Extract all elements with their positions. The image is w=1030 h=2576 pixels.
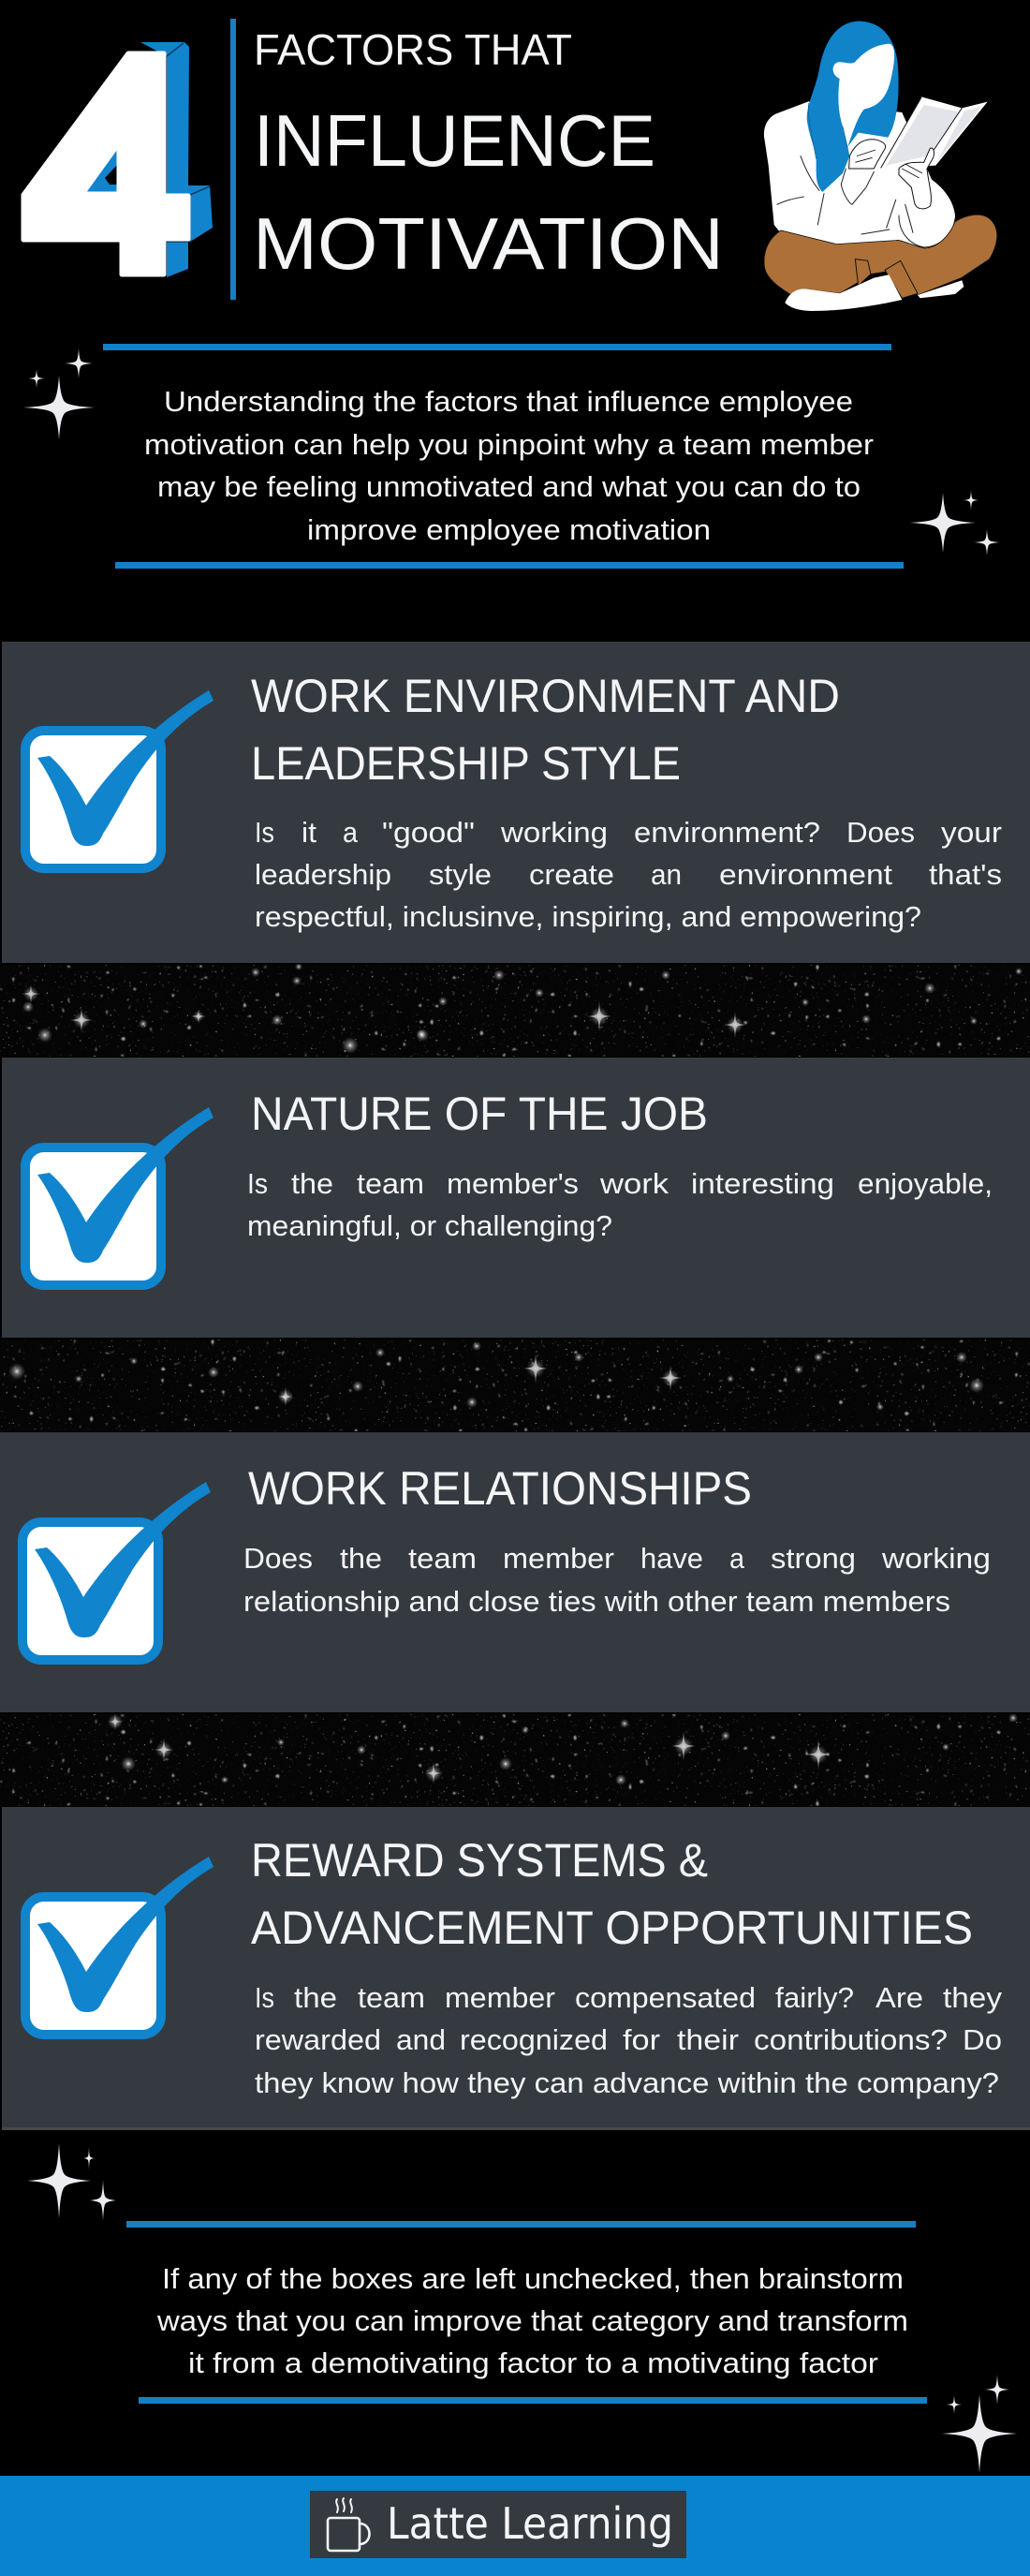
icon: checked box 1: [25, 690, 213, 868]
sparkles: upper left: [23, 348, 95, 439]
closing text: If any of the boxes are left unchecked, then brainstorm: [162, 2262, 904, 2295]
body text: recognized: [460, 2023, 608, 2056]
panel: nature of the job: [2, 1058, 1030, 1338]
heading: [251, 1834, 973, 1954]
body text: leadership: [255, 858, 391, 891]
body text: your: [941, 816, 1002, 849]
footer band: [0, 2476, 1030, 2576]
body text: they know how they can advance within the company?: [255, 2066, 999, 2099]
body text: their: [677, 2023, 739, 2056]
body text: it: [302, 816, 316, 849]
panel: work environment and leadership style: [2, 642, 1030, 963]
body text: Do: [963, 2023, 1002, 2056]
title: INFLUENCE: [254, 99, 655, 182]
body text: work: [599, 1167, 670, 1200]
logo: Latte Learning: [310, 2491, 686, 2558]
closing text: ways that you can improve that category and transform: [156, 2304, 908, 2337]
body text: fairly?: [775, 1981, 854, 2014]
icon: checked box 4: [25, 1857, 213, 2035]
body text: working: [881, 1542, 991, 1575]
title: [253, 25, 724, 285]
body text: environment: [719, 858, 892, 891]
body text: they: [943, 1981, 1003, 2014]
divider: top intro rule: [103, 344, 891, 350]
heading: ADVANCEMENT OPPORTUNITIES: [251, 1902, 973, 1954]
body text: Are: [876, 1981, 923, 2014]
body text: Is: [255, 816, 274, 849]
heading: REWARD SYSTEMS &: [251, 1834, 708, 1887]
body text: style: [429, 858, 492, 891]
intro text: [144, 385, 874, 546]
body text: "good": [382, 816, 475, 849]
sparkles: lower right: [942, 2375, 1017, 2473]
brand name: Latte Learning: [387, 2498, 673, 2549]
body text: member: [445, 1981, 555, 2014]
body text: have: [640, 1542, 703, 1575]
divider: bottom closing rule: [139, 2397, 927, 2404]
panel: work relationships: [0, 1432, 1030, 1712]
body text: that's: [929, 858, 1002, 891]
heading: NATURE OF THE JOB: [251, 1088, 708, 1140]
body text: a: [343, 816, 359, 849]
star band 1: [0, 963, 1030, 1057]
heading: [251, 670, 840, 790]
body text: strong: [771, 1542, 856, 1575]
divider: top closing rule: [126, 2221, 916, 2228]
intro text: improve employee motivation: [307, 513, 711, 546]
body text: interesting: [691, 1167, 834, 1200]
title: MOTIVATION: [253, 202, 724, 285]
body text: the: [340, 1542, 382, 1575]
heading: WORK RELATIONSHIPS: [248, 1462, 752, 1515]
body text: team: [408, 1542, 477, 1575]
sparkles: lower left: [27, 2143, 116, 2221]
icon: coffee mug: [328, 2498, 369, 2551]
body text: working: [500, 816, 608, 849]
intro text: may be feeling unmotivated and what you can do to: [157, 470, 861, 503]
body text: an: [651, 858, 682, 891]
closing text: it from a demotivating factor to a motivating factor: [188, 2347, 878, 2379]
intro text: Understanding the factors that influence employee: [164, 385, 853, 418]
body text: create: [529, 858, 614, 891]
body text: [255, 816, 1002, 933]
body text: Does: [846, 816, 915, 849]
body text: and: [396, 2023, 446, 2056]
body text: team: [357, 1167, 424, 1200]
body text: meaningful, or challenging?: [247, 1209, 612, 1242]
star band 2: [0, 1340, 1030, 1431]
body text: member's: [447, 1167, 579, 1200]
divider: bottom intro rule: [115, 562, 904, 569]
icon: woman reading a book: [764, 22, 997, 311]
icon: big 3D number 4: [23, 42, 213, 277]
heading: WORK ENVIRONMENT AND: [251, 670, 840, 722]
body text: environment?: [634, 816, 820, 849]
body text: [255, 1981, 1003, 2099]
title: FACTORS THAT: [254, 25, 572, 74]
icon: checked box 2: [25, 1107, 213, 1285]
body text: respectful, inclusinve, inspiring, and empowering?: [255, 900, 921, 933]
body text: member: [503, 1542, 614, 1575]
body text: compensated: [575, 1981, 756, 2014]
body text: Does: [243, 1542, 313, 1575]
star band 3: [0, 1713, 1030, 1806]
panel: reward systems and advancement opportunities: [2, 1807, 1030, 2130]
body text: for: [623, 2023, 660, 2056]
body text: rewarded: [255, 2023, 381, 2056]
body text: team: [358, 1981, 425, 2014]
body text: the: [294, 1981, 337, 2014]
body text: a: [729, 1542, 745, 1575]
body text: [243, 1542, 991, 1618]
body text: enjoyable,: [858, 1167, 993, 1200]
divider: title vertical line: [230, 19, 236, 300]
intro text: motivation can help you pinpoint why a team member: [144, 428, 874, 461]
body text: Is: [247, 1167, 268, 1200]
body text: contributions?: [754, 2023, 948, 2056]
closing text: [156, 2262, 908, 2379]
icon: checked box 3: [22, 1482, 211, 1660]
body text: Is: [255, 1981, 274, 2014]
body text: relationship and close ties with other team members: [243, 1585, 950, 1618]
heading: LEADERSHIP STYLE: [251, 737, 681, 790]
body text: the: [291, 1167, 333, 1200]
body text: [247, 1167, 993, 1242]
sparkles: intro right: [910, 490, 1000, 555]
